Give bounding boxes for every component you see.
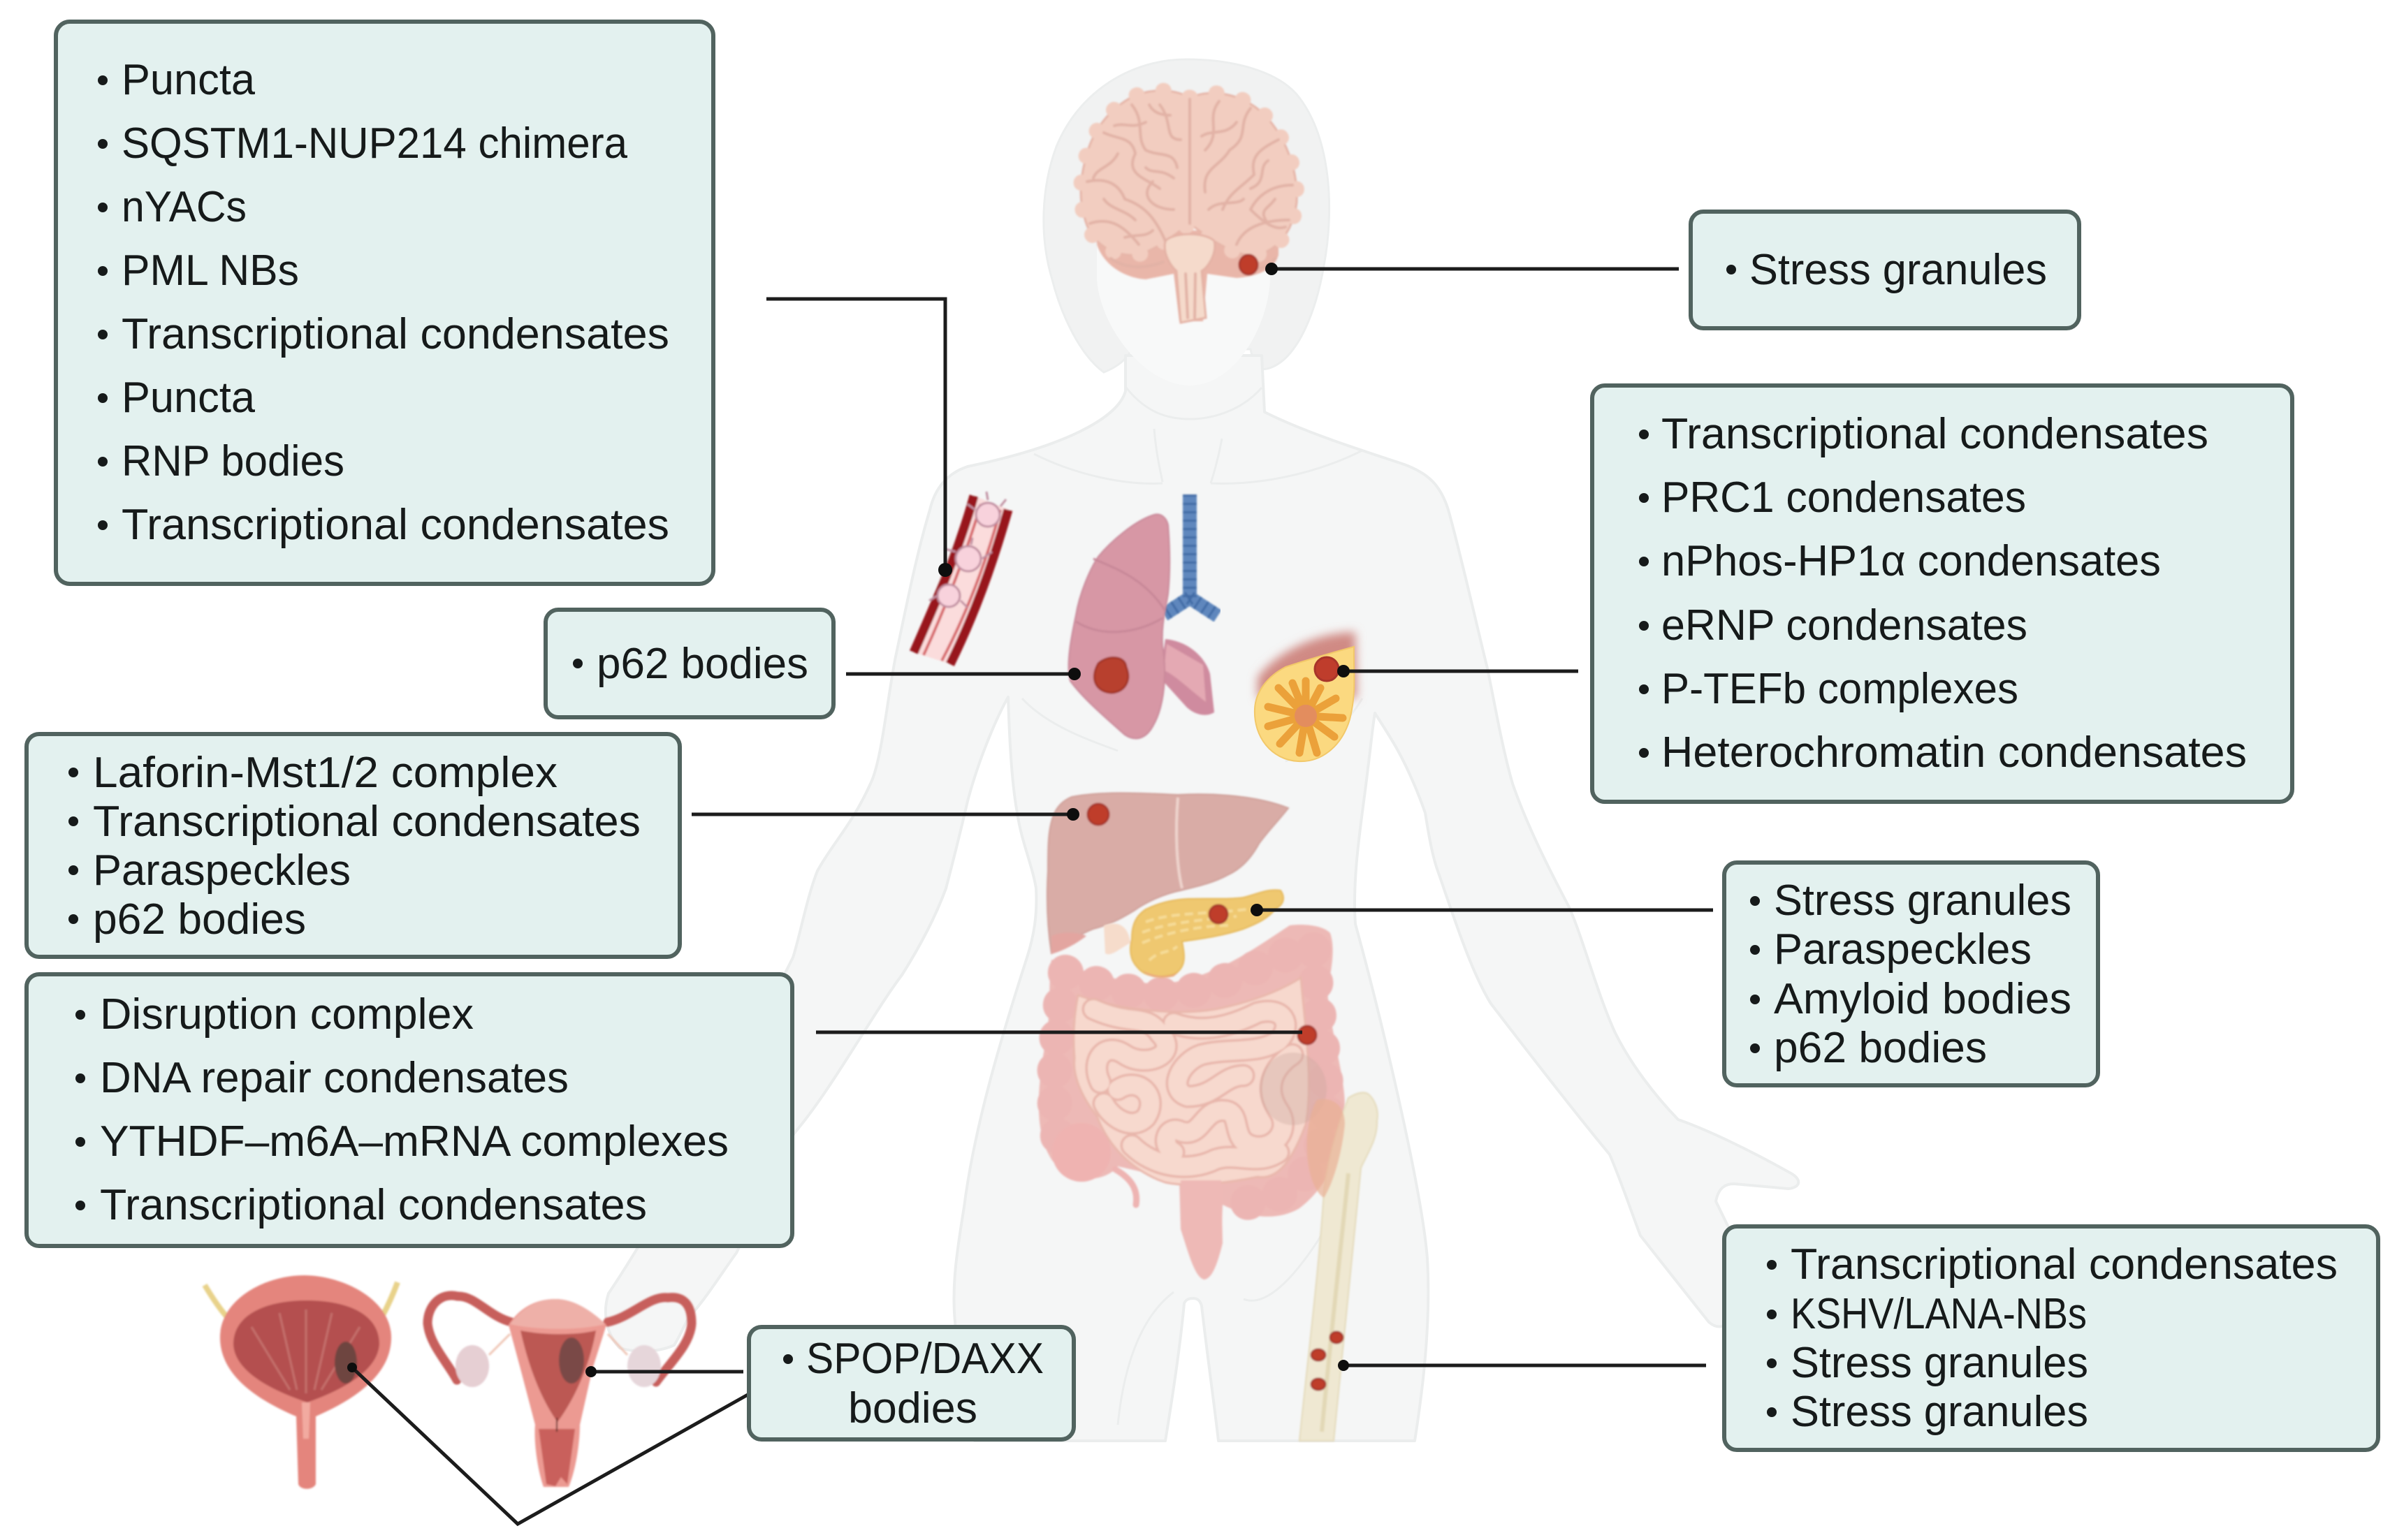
small intestine xyxy=(1074,978,1309,1185)
organ: trachea xyxy=(1164,494,1218,616)
panel: brain condensates: Stress granules xyxy=(1749,246,2047,294)
panel: blood vessel condensates xyxy=(56,22,713,584)
panel: bone condensates: Stress granules xyxy=(1791,1339,2088,1387)
panel: colon condensates xyxy=(27,974,792,1246)
connector: colon xyxy=(816,1031,1302,1034)
organ: blood vessel xyxy=(912,492,1010,664)
panel: blood vessel condensates: SQSTM1-NUP214 chimera xyxy=(122,119,627,168)
panel: pancreas condensates: p62 bodies xyxy=(1774,1024,1987,1072)
panel: breast condensates: nPhos-HP1α condensates xyxy=(1661,537,2161,585)
panel: breast condensates: P-TEFb complexes xyxy=(1661,665,2018,713)
colon haustra xyxy=(1054,946,1327,1203)
organ: pancreas xyxy=(1104,890,1283,978)
appendix xyxy=(1115,1169,1137,1205)
panel: breast condensates xyxy=(1592,386,2292,802)
tumor: liver xyxy=(1088,804,1109,825)
tumor: colon xyxy=(1298,1026,1316,1044)
panel: bone condensates: Transcriptional condensates xyxy=(1791,1240,2338,1289)
panel: blood vessel condensates: Transcriptional condensates xyxy=(122,501,669,549)
connector: pancreas xyxy=(1251,904,1713,916)
connector: uterus xyxy=(585,1366,743,1377)
organ: brain xyxy=(1081,91,1297,323)
connector: lung xyxy=(846,668,1081,680)
panel: breast condensates: Transcriptional condensates xyxy=(1661,410,2208,458)
ovaries xyxy=(456,1345,489,1387)
panel: liver condensates: Paraspeckles xyxy=(93,846,351,895)
organ: intestines xyxy=(1039,925,1346,1279)
panel: liver condensates: Laforin-Mst1/2 complex xyxy=(93,749,558,797)
panel: brain condensates xyxy=(1691,212,2079,328)
organ: breast xyxy=(1255,632,1357,761)
organ: bladder xyxy=(205,1275,398,1489)
body silhouette xyxy=(606,59,1798,1441)
panel: blood vessel condensates: Puncta xyxy=(122,56,256,104)
panel: pancreas condensates xyxy=(1724,863,2098,1085)
panel: bladder and uterus condensates xyxy=(749,1327,1074,1439)
connector: brain xyxy=(1265,263,1679,275)
panel: pancreas condensates: Stress granules xyxy=(1774,877,2071,925)
panel: colon condensates: DNA repair condensates xyxy=(100,1054,569,1102)
tumor: uterus xyxy=(559,1337,584,1384)
panel: blood vessel condensates: Transcriptional condensates xyxy=(122,310,669,358)
panel: colon condensates: Disruption complex xyxy=(100,990,474,1039)
tumor: pancreas xyxy=(1209,905,1228,923)
panel: blood vessel condensates: nYACs xyxy=(122,183,247,231)
panel: bladder and uterus condensates: bodies xyxy=(848,1384,977,1432)
panel: pancreas condensates: Paraspeckles xyxy=(1774,925,2032,974)
panel: liver condensates: p62 bodies xyxy=(93,895,306,944)
panel: bone condensates: Stress granules xyxy=(1791,1388,2088,1436)
panel: bladder and uterus condensates: SPOP/DAXX xyxy=(806,1335,1044,1383)
panel: liver condensates xyxy=(27,734,680,957)
breast lobules xyxy=(1268,681,1343,753)
connector: liver xyxy=(692,808,1079,821)
connector: bladder to box xyxy=(347,1363,749,1524)
panel: lung condensates xyxy=(546,610,833,717)
panel: bone condensates: KSHV/LANA-NBs xyxy=(1791,1290,2087,1338)
organ: uterus xyxy=(428,1296,692,1487)
tumor: bladder xyxy=(335,1342,357,1384)
panel: lung condensates: p62 bodies xyxy=(597,640,808,688)
panel: pancreas condensates: Amyloid bodies xyxy=(1774,975,2071,1023)
tumor: lung xyxy=(1094,658,1128,693)
tumors: femur xyxy=(1330,1332,1343,1343)
connector: femur xyxy=(1338,1360,1706,1371)
panel: breast condensates: eRNP condensates xyxy=(1661,601,2027,650)
panel: bone condensates xyxy=(1724,1226,2378,1450)
tumor: brain xyxy=(1239,255,1258,274)
tumor: breast xyxy=(1315,657,1339,681)
panel: blood vessel condensates: PML NBs xyxy=(122,247,299,295)
panel: blood vessel condensates: Puncta xyxy=(122,374,256,422)
cells in vessel xyxy=(929,492,1006,608)
organ: liver xyxy=(1047,793,1288,954)
connector: blood vessel xyxy=(766,299,952,577)
panel: colon condensates: Transcriptional condensates xyxy=(100,1181,647,1229)
panel: colon condensates: YTHDF–m6A–mRNA complexes xyxy=(100,1117,729,1166)
panel: liver condensates: Transcriptional condensates xyxy=(93,798,641,846)
panel: blood vessel condensates: RNP bodies xyxy=(122,437,344,485)
organ: femur xyxy=(1260,1053,1378,1441)
organ: lung xyxy=(1069,514,1214,738)
panel: breast condensates: Heterochromatin condensates xyxy=(1661,728,2247,777)
panel: breast condensates: PRC1 condensates xyxy=(1661,474,2026,522)
connector: breast xyxy=(1337,665,1578,677)
